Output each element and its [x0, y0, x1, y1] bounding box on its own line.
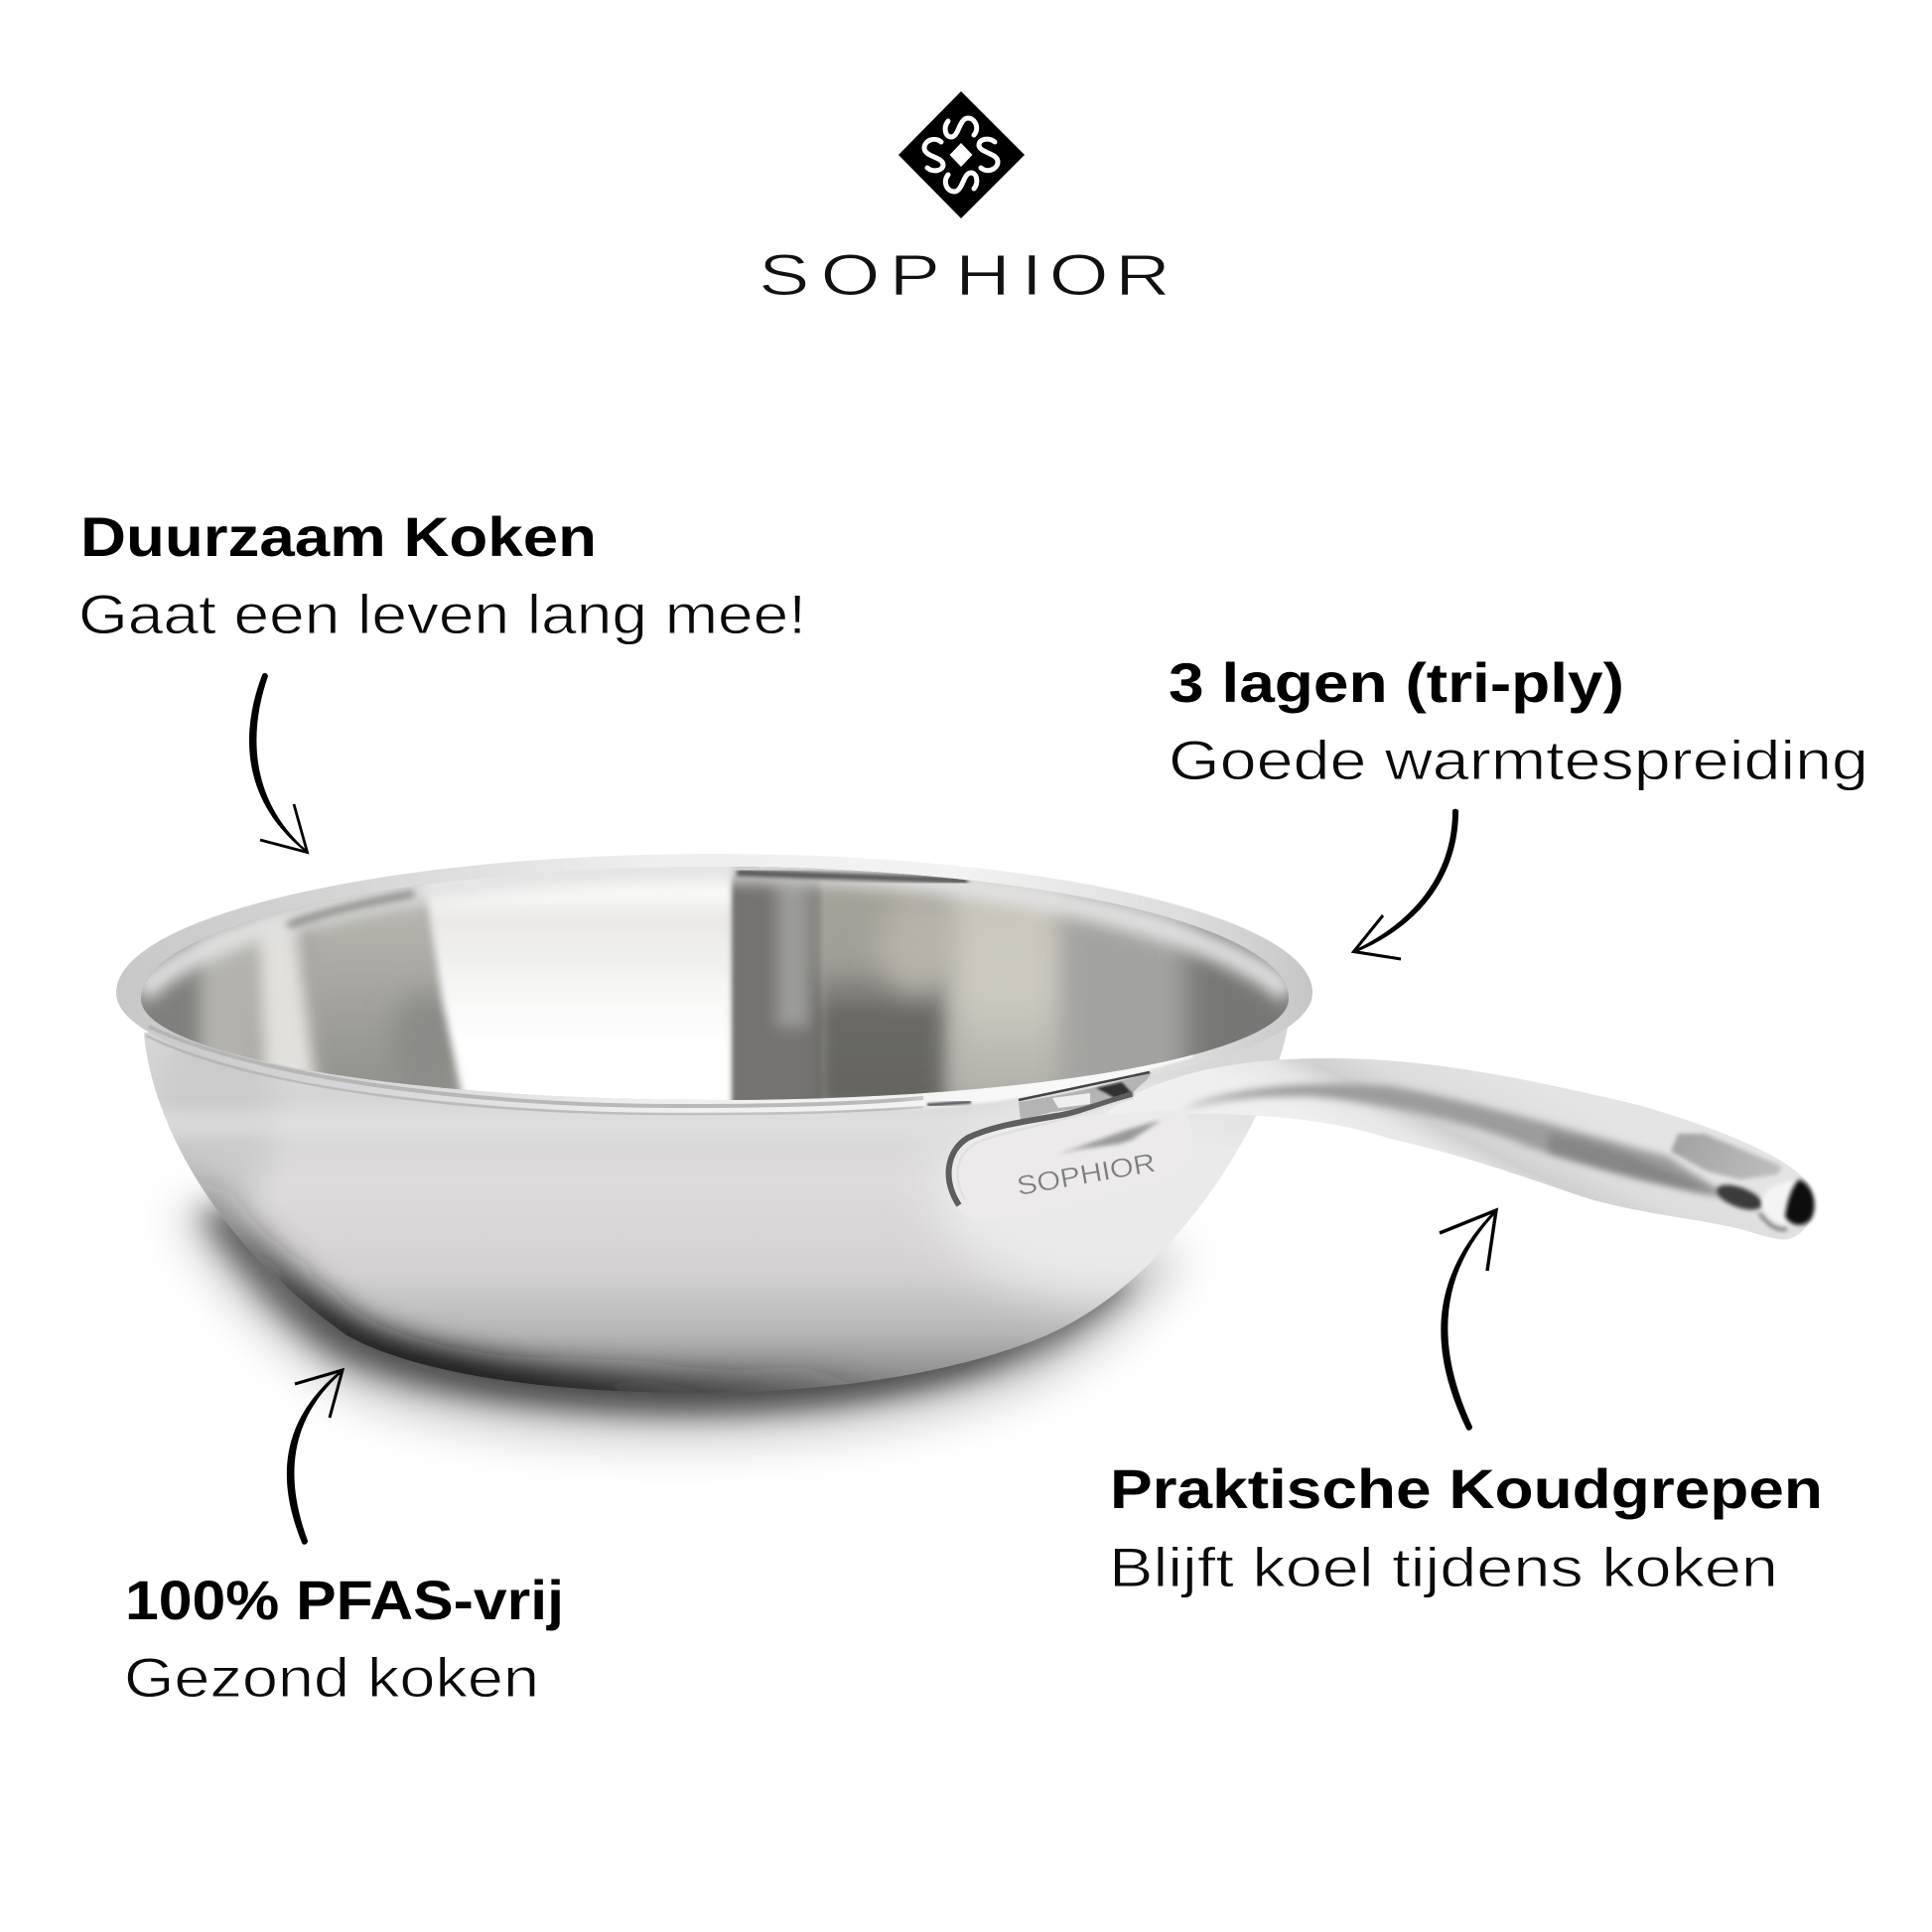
- callout: Duurzaam Koken: Duurzaam Koken: [80, 505, 597, 568]
- callout: 100% PFAS-vrij: [124, 1569, 564, 1709]
- arrow: PFAS callout to pan base: [287, 1370, 343, 1545]
- rivet bracket: [1019, 1072, 1152, 1120]
- interior right shading: [733, 864, 1306, 1107]
- arrow: handle callout to handle: [1440, 1210, 1497, 1431]
- brand logo: [759, 91, 1171, 308]
- plate reflection: [1057, 1113, 1186, 1155]
- arrow: tri-ply to pan wall: [1354, 809, 1458, 959]
- plate engraved brand text: SOPHIOR: [1015, 1148, 1158, 1201]
- pan interior: [141, 867, 1289, 1100]
- handle recess: [1671, 1134, 1782, 1179]
- pan drop shadow: [175, 1140, 1187, 1441]
- interior centre highlight: [421, 856, 733, 1107]
- callout: 100% PFAS-vrij: 100% PFAS-vrij: [125, 1569, 564, 1631]
- handle end dark smudge: [1714, 1181, 1763, 1213]
- callout: 3 lagen: Goede warmtespreiding: [1169, 729, 1868, 791]
- handle mounting plate: [948, 1072, 1192, 1220]
- handle: [1104, 1058, 1819, 1239]
- callout: 3 lagen: [1169, 651, 1868, 791]
- pan rim: [116, 854, 1312, 1114]
- callout: Praktische Koudgrepen: [1109, 1457, 1823, 1598]
- handle end cap highlight: [1759, 1181, 1795, 1226]
- wok pan: [116, 854, 1837, 1410]
- callout: Praktische Koudgrepen: Blijft koel tijdens koken: [1109, 1536, 1778, 1598]
- handle end cap: [1785, 1179, 1815, 1225]
- interior upper edge glow: [141, 869, 1289, 993]
- arrow: durable cooking to pan rim: [249, 673, 308, 852]
- callout: 3 lagen: 3 lagen (tri-ply): [1169, 651, 1624, 714]
- interior left shading: [141, 901, 462, 1090]
- handle dark reflection band: [1181, 1084, 1727, 1196]
- pan outer body: [144, 1027, 1288, 1392]
- logo diamond emblem: [898, 91, 1025, 218]
- plate edge highlight: [949, 1094, 1132, 1205]
- callout: Duurzaam Koken: [78, 505, 806, 645]
- callout: Duurzaam Koken: Gaat een leven lang mee!: [78, 583, 806, 645]
- logo wordmark: SOPHIOR: [759, 243, 1171, 308]
- callout: Praktische Koudgrepen: Praktische Koudgrepen: [1110, 1457, 1823, 1520]
- callout: 100% PFAS-vrij: Gezond koken: [124, 1646, 539, 1709]
